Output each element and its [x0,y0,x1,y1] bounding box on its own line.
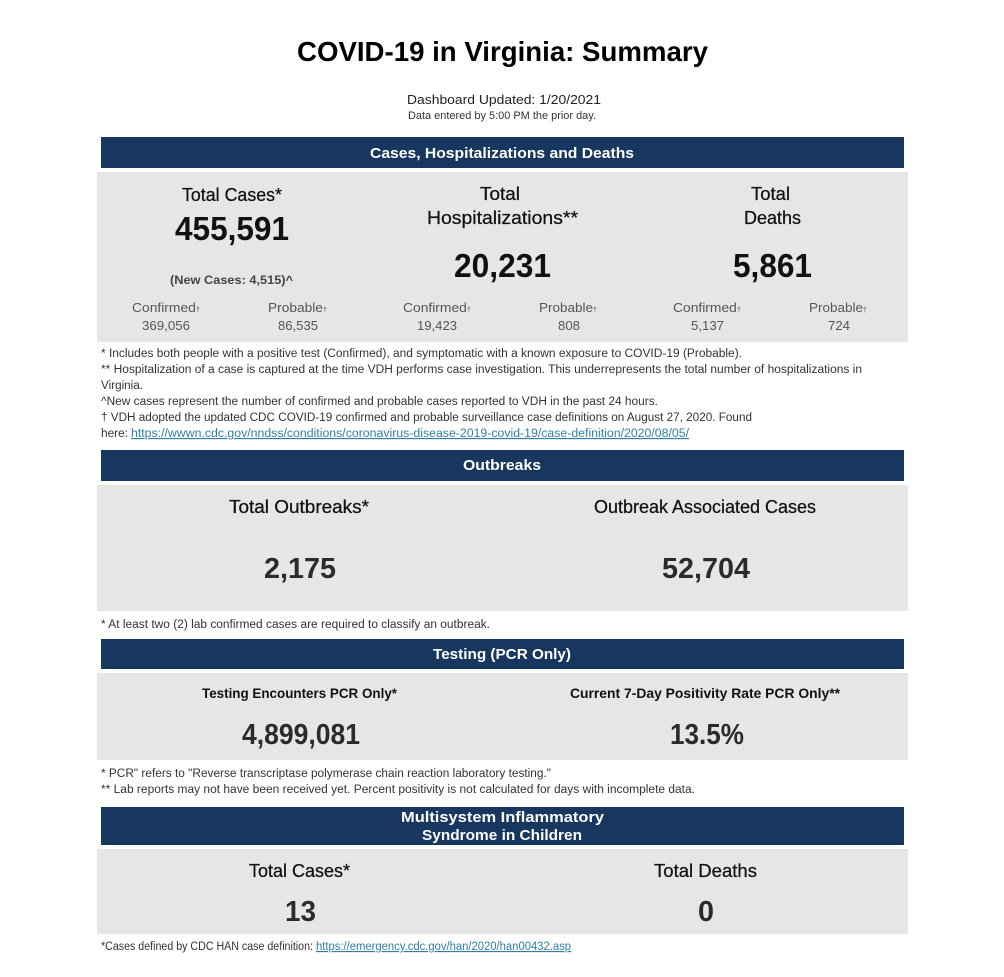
footnote: outbreaks: * At least two (2) lab confirmed cases are required to classify an outbreak. [101,619,490,631]
footnotes: cases section: ** Hospitalization of a case is captured at the time VDH performs case investigation. This underrepresents the total number of hospitalizations in [101,364,862,376]
new cases: (New Cases: 4,515)^ [170,273,293,287]
data entry note: Data entered by 5:00 PM the prior day. [408,110,596,122]
outbreak associated cases number: 52,704 [662,553,750,585]
probable label: cases: Probable † [268,300,327,315]
footnotes: cases section: Virginia. [101,380,143,392]
total hospitalizations label: Hospitalizations** [427,208,578,228]
panel: multisystem inflammatory syndrome in children [97,849,908,934]
total hospitalizations label: Total [480,184,520,204]
total outbreaks number: 2,175 [264,553,336,585]
panel: outbreaks [97,485,908,611]
panel: testing [97,673,908,760]
MIS-C total deaths number: 0 [698,896,714,928]
footnotes: testing: ** Lab reports may not have been received yet. Percent positivity is not calculated for days with incomplete data. [101,784,695,796]
probable label: hospitalizations: Probable † [539,300,597,315]
total outbreaks label: Total Outbreaks* [229,497,369,517]
confirmed label: deaths: Confirmed † [673,300,741,315]
testing encounters number: 4,899,081 [242,719,360,751]
total hospitalizations label [427,184,578,228]
positivity rate label: Current 7-Day Positivity Rate PCR Only** [570,685,841,701]
footnotes: cases section: here: [101,428,128,440]
probable label: deaths: Probable † [809,300,867,315]
footnotes: cases section [101,348,862,440]
total cases number: 455,591 [175,210,289,247]
section header: testing: Testing (PCR Only) [433,646,571,663]
confirmed label: hospitalizations: Confirmed † [403,300,471,315]
section header: multisystem inflammatory syndrome in children: Syndrome in Children [422,827,582,844]
testing encounters label: Testing Encounters PCR Only* [202,685,398,701]
footnotes: cases section: * Includes both people with a positive test (Confirmed), and symptomatic with a known exposure to COVID-19 (Probable). [101,348,742,360]
footnotes: testing: * PCR" refers to "Reverse transcriptase polymerase chain reaction laboratory testing." [101,768,551,780]
footnote: MIS-C [101,941,571,953]
total deaths label: Total [751,184,790,204]
dashboard updated date: Dashboard Updated: 1/20/2021 [407,92,601,107]
MIS-C total cases number: 13 [285,896,316,928]
title: COVID-19 in Virginia: Summary [297,36,708,67]
section header: testing [101,639,904,669]
MIS-C total cases label: Total Cases* [249,861,350,881]
footnotes: testing [101,768,695,796]
confirmed value: deaths: 5,137 [691,318,724,333]
positivity rate number: 13.5% [670,719,744,751]
footnote: MIS-C: *Cases defined by CDC HAN case definition: [101,941,313,953]
section header: multisystem inflammatory syndrome in children: Multisystem Inflammatory [401,809,605,826]
total hospitalizations number: 20,231 [454,247,551,284]
confirmed label: cases: Confirmed † [132,300,200,315]
total deaths label: Deaths [744,208,801,228]
total deaths number: 5,861 [733,247,812,284]
section header: cases, hospitalizations and deaths: Cases, Hospitalizations and Deaths [370,145,634,162]
footnotes: cases section: ^New cases represent the number of confirmed and probable cases reported to VDH in the past 24 hours. [101,396,658,408]
section header: outbreaks: Outbreaks [463,457,541,474]
section header: multisystem inflammatory syndrome in children [101,807,904,845]
MIS-C total deaths label: Total Deaths [654,861,757,881]
total cases label: Total Cases* [182,185,282,205]
probable value: hospitalizations: 808 [558,318,580,333]
confirmed value: cases: 369,056 [142,318,190,333]
footnotes: cases section: † VDH adopted the updated CDC COVID-19 confirmed and probable surveillance case definitions on August 27, 2020. Found [101,412,752,424]
outbreak associated cases label: Outbreak Associated Cases [594,497,816,517]
probable value: deaths: 724 [828,318,850,333]
panel: cases, hospitalizations and deaths [97,172,908,342]
footnotes: cases section: https://wwwn.cdc.gov/nndss/conditions/coronavirus-disease-2019-covid-19/case-definition/2020/08/05/ [131,428,690,440]
section header: cases, hospitalizations and deaths [101,137,904,168]
probable value: cases: 86,535 [278,318,318,333]
total deaths label [744,184,801,228]
confirmed value: hospitalizations: 19,423 [417,318,457,333]
section header: outbreaks [101,450,904,481]
footnote: MIS-C: https://emergency.cdc.gov/han/2020/han00432.asp [316,941,571,953]
